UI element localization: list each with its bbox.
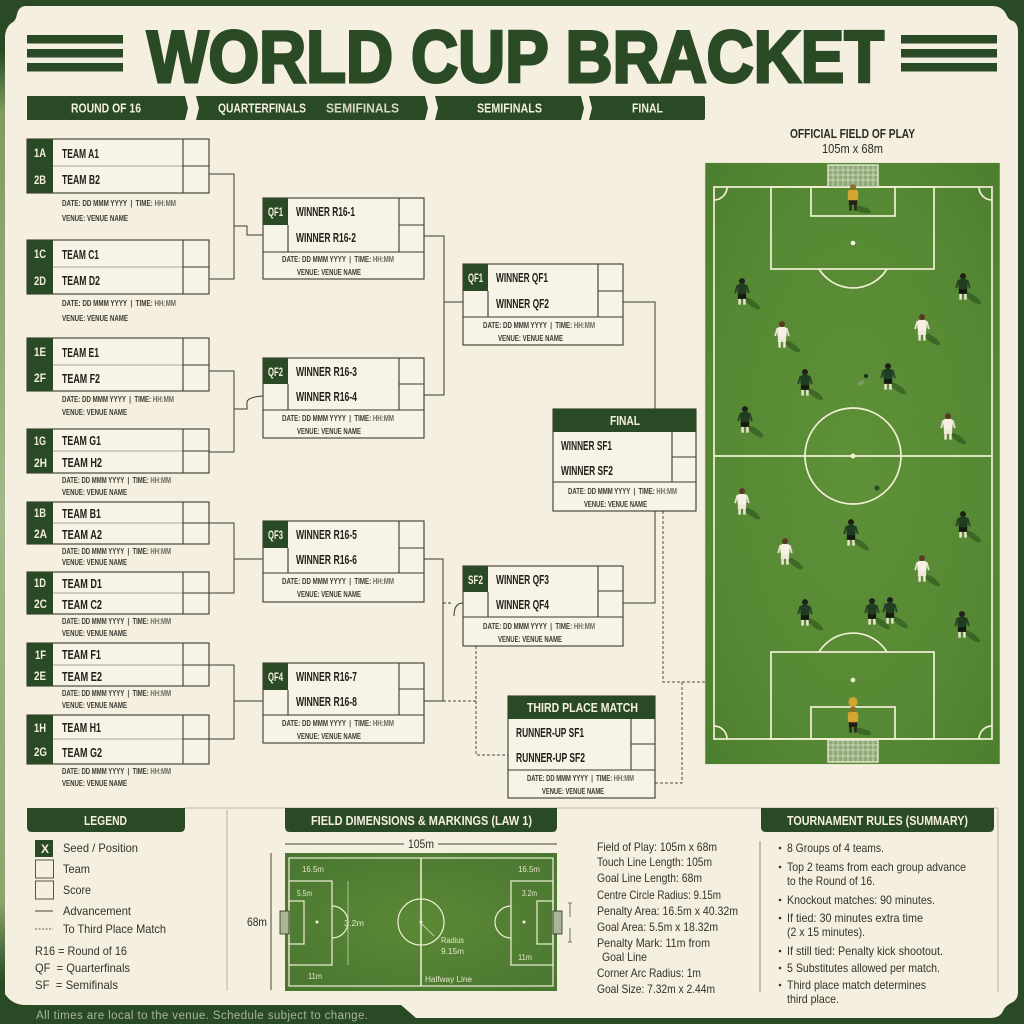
seed badge	[263, 663, 288, 690]
teams: TEAM F2	[62, 372, 100, 386]
seeds	[27, 572, 53, 614]
cell lines	[263, 521, 424, 573]
abbreviations: R16 = Round of 16	[35, 944, 127, 958]
match: R16 G1 v H2	[27, 429, 209, 497]
field specification list: Penalty Area: 16.5m x 40.32m	[597, 904, 738, 918]
field specification list: Goal Line Length: 68m	[597, 871, 702, 885]
teams: WINNER QF3	[496, 573, 549, 587]
teams	[53, 721, 183, 760]
scores	[183, 240, 209, 294]
date and venue: VENUE: VENUE NAME	[498, 333, 563, 343]
seeds: 2F	[34, 371, 46, 385]
teams: RUNNER-UP SF2	[516, 751, 585, 765]
seeds: 2C	[34, 597, 47, 611]
small pitch labels: 16.5m	[518, 865, 540, 874]
date and venue: DATE: DD MMM YYYY | TIME: HH:MM	[62, 475, 171, 485]
legend: advancement: Advancement	[63, 904, 132, 918]
teams: TEAM E1	[62, 346, 99, 360]
cell lines	[508, 719, 655, 770]
date and venue	[62, 298, 176, 323]
scores	[183, 338, 209, 391]
teams: WINNER QF2	[496, 297, 549, 311]
title text: WORLD CUP BRACKET	[147, 17, 884, 98]
teams: TEAM C2	[62, 598, 102, 612]
small pitch labels	[297, 865, 540, 984]
date and venue: VENUE: VENUE NAME	[542, 786, 604, 796]
teams: WINNER R16-1	[296, 205, 355, 219]
match: R16 A1 v B2	[27, 139, 209, 223]
date and venue: VENUE: VENUE NAME	[62, 487, 127, 497]
teams	[53, 248, 183, 288]
field markings	[714, 187, 992, 739]
date and venue	[62, 394, 174, 417]
seeds: 2G	[34, 745, 47, 759]
date and venue	[282, 413, 394, 436]
teams: WINNER SF1	[561, 439, 612, 453]
date and venue	[62, 688, 171, 710]
bottom divider	[185, 807, 998, 809]
field specification list: Goal Size: 7.32m x 2.44m	[597, 982, 715, 996]
abbreviations: SF = Semifinals	[35, 978, 118, 992]
teams	[53, 648, 183, 684]
legend header	[27, 808, 185, 832]
match: R16 F1 v E2	[27, 643, 209, 710]
seeds: 2D	[34, 274, 46, 288]
teams: TEAM C1	[62, 248, 99, 262]
cell lines	[263, 198, 424, 252]
date and venue: DATE: DD MMM YYYY | TIME: HH:MM	[62, 298, 176, 308]
connector lines	[209, 174, 705, 783]
date and venue: VENUE: VENUE NAME	[62, 407, 127, 417]
dimension: height 68m: 68m	[247, 917, 267, 929]
teams: WINNER QF1	[496, 271, 548, 285]
small pitch labels: 11m	[518, 953, 532, 962]
round: round of 16: ROUND OF 16	[71, 102, 141, 116]
field specification list: Touch Line Length: 105m	[597, 855, 712, 869]
rules text: If still tied: Penalty kick shootout.	[787, 944, 943, 958]
legend: team: Team	[63, 862, 90, 876]
match: R16 D1 v C2	[27, 572, 209, 638]
legend: score: Score	[63, 883, 91, 897]
date and venue	[483, 320, 595, 343]
round: quarterfinals: SEMIFINALS	[326, 102, 399, 116]
legend: seed	[35, 840, 138, 857]
scores	[183, 643, 209, 686]
goal bottom	[828, 740, 878, 762]
rules header: TOURNAMENT RULES (SUMMARY)	[787, 814, 968, 828]
date and venue: VENUE: VENUE NAME	[297, 267, 361, 277]
date and venue: DATE: DD MMM YYYY | TIME: HH:MM	[282, 413, 394, 423]
seeds: 1B	[34, 506, 46, 520]
date and venue	[527, 773, 634, 796]
field specification list: Field of Play: 105m x 68m	[597, 840, 717, 854]
rules text: 5 Substitutes allowed per match.	[787, 961, 940, 975]
teams	[53, 507, 183, 542]
teams: TEAM G2	[62, 746, 102, 760]
scores	[183, 502, 209, 544]
teams	[296, 205, 356, 245]
seeds	[27, 240, 53, 294]
teams	[561, 439, 613, 478]
rules text	[787, 841, 966, 1006]
field spots	[850, 241, 856, 682]
round: quarterfinals	[196, 96, 428, 120]
cell lines	[263, 358, 424, 410]
teams	[296, 365, 357, 404]
match: SF1	[463, 264, 623, 345]
cell lines	[553, 432, 696, 482]
dimension: height 68m	[247, 853, 271, 990]
date and venue: DATE: DD MMM YYYY | TIME: HH:MM	[282, 718, 394, 728]
seeds: 1D	[34, 576, 46, 590]
cell lines	[263, 663, 424, 715]
heading: official field of play: OFFICIAL FIELD OF PLAY	[790, 127, 916, 141]
teams: TEAM H1	[62, 721, 101, 735]
date and venue: VENUE: VENUE NAME	[62, 628, 127, 638]
panel: field dimensions and markings	[247, 808, 738, 996]
seed badge	[463, 566, 488, 592]
date and venue: VENUE: VENUE NAME	[584, 499, 647, 509]
seeds: 1A	[34, 146, 46, 160]
teams: TEAM H2	[62, 456, 102, 470]
scores	[183, 572, 209, 614]
legend header: LEGEND	[84, 814, 127, 828]
date and venue: DATE: DD MMM YYYY | TIME: HH:MM	[483, 320, 595, 330]
teams: TEAM A2	[62, 528, 102, 542]
teams: WINNER R16-3	[296, 365, 357, 379]
seeds: 1C	[34, 247, 46, 261]
legend: third place path: To Third Place Match	[63, 922, 166, 936]
date and venue	[282, 576, 394, 599]
legend: team	[36, 860, 90, 878]
date and venue	[282, 254, 394, 277]
match: SF2	[463, 566, 623, 646]
round: final: FINAL	[632, 102, 663, 116]
field specification list: Penalty Mark: 11m from	[597, 936, 710, 950]
small pitch labels: 3.2m	[344, 919, 364, 928]
teams: WINNER QF4	[496, 598, 549, 612]
date and venue	[62, 198, 176, 223]
seeds: 2H	[34, 456, 47, 470]
seed badge: QF1	[268, 205, 283, 219]
third place header	[508, 696, 655, 719]
field specification list	[597, 840, 738, 996]
teams: WINNER SF2	[561, 464, 613, 478]
legend: advancement	[35, 904, 132, 918]
teams	[53, 434, 183, 470]
teams: TEAM B2	[62, 173, 100, 187]
date and venue: VENUE: VENUE NAME	[62, 557, 127, 567]
teams	[53, 346, 183, 386]
teams: TEAM F1	[62, 648, 101, 662]
legend: seed: Seed / Position	[63, 841, 138, 855]
title stripes right	[901, 35, 997, 72]
seed badge	[263, 198, 288, 225]
match: QF4	[263, 663, 424, 743]
teams: WINNER R16-4	[296, 390, 357, 404]
rules text: If tied: 30 minutes extra time	[787, 911, 923, 925]
heading: official field of play	[790, 127, 916, 156]
seeds: 1H	[34, 721, 46, 735]
match: R16 H1 v G2	[27, 715, 209, 788]
seed badge	[263, 358, 288, 384]
scores	[183, 715, 209, 764]
date and venue	[62, 546, 171, 567]
goal width marker	[568, 903, 572, 942]
teams	[53, 147, 183, 187]
seed badge	[463, 264, 488, 291]
seed badge	[263, 521, 288, 548]
rules header	[761, 808, 994, 832]
match: QF2	[263, 358, 424, 438]
round: round of 16	[27, 96, 188, 120]
field specification list: Corner Arc Radius: 1m	[597, 966, 701, 980]
seeds: 2E	[34, 669, 46, 683]
date and venue	[62, 475, 171, 497]
footer note: All times are local to the venue. Schedule subject to change.	[36, 1010, 368, 1022]
teams: TEAM G1	[62, 434, 101, 448]
date and venue: VENUE: VENUE NAME	[62, 778, 127, 788]
teams: TEAM E2	[62, 670, 102, 684]
field specification list: Goal Line	[602, 950, 647, 964]
goal top	[828, 165, 878, 187]
teams: WINNER R16-2	[296, 231, 356, 245]
left edge colour strip	[0, 0, 6, 1024]
match: final	[553, 409, 696, 511]
panel: legend	[27, 808, 185, 992]
date and venue: DATE: DD MMM YYYY | TIME: HH:MM	[483, 621, 595, 631]
date and venue: VENUE: VENUE NAME	[62, 213, 128, 223]
match: third place	[508, 696, 655, 798]
round: semifinals: SEMIFINALS	[477, 102, 542, 116]
rules text: Knockout matches: 90 minutes.	[787, 893, 935, 907]
field specification list: Goal Area: 5.5m x 18.32m	[597, 920, 718, 934]
teams: WINNER R16-7	[296, 670, 357, 684]
date and venue: VENUE: VENUE NAME	[62, 700, 127, 710]
field dimensions header	[285, 808, 557, 832]
seeds: 1E	[34, 345, 46, 359]
heading: official field of play: 105m x 68m	[822, 142, 883, 156]
small pitch labels: 5.5m	[297, 889, 312, 898]
teams	[296, 528, 357, 567]
seed badge: QF2	[268, 365, 283, 379]
match: R16 C1 v D2	[27, 240, 209, 323]
field specification list: Centre Circle Radius: 9.15m	[597, 888, 721, 902]
final header	[553, 409, 696, 432]
seeds: 2B	[34, 173, 46, 187]
seeds: 2A	[34, 527, 47, 541]
cell lines	[463, 264, 623, 317]
small pitch labels: 9.15m	[441, 947, 464, 956]
date and venue: DATE: DD MMM YYYY | TIME: HH:MM	[62, 688, 171, 698]
seeds	[27, 715, 53, 764]
seed badge: QF1	[468, 271, 483, 285]
seeds	[27, 502, 53, 544]
abbreviations: QF = Quarterfinals	[35, 961, 130, 975]
match: QF3	[263, 521, 424, 602]
match: R16 E1 v F2	[27, 338, 209, 417]
grass	[705, 163, 1000, 764]
seed badge: QF4	[268, 670, 283, 684]
small pitch spots	[316, 920, 526, 924]
seeds	[27, 643, 53, 686]
round: final	[589, 96, 705, 120]
teams: TEAM D2	[62, 274, 100, 288]
teams	[296, 670, 357, 709]
title	[27, 17, 997, 98]
seeds	[27, 429, 53, 473]
date and venue: VENUE: VENUE NAME	[62, 313, 128, 323]
teams: WINNER R16-5	[296, 528, 357, 542]
rules text: to the Round of 16.	[787, 874, 875, 888]
date and venue: DATE: DD MMM YYYY | TIME: HH:MM	[282, 254, 394, 264]
date and venue: DATE: DD MMM YYYY | TIME: HH:MM	[62, 394, 174, 404]
field dimensions header: FIELD DIMENSIONS & MARKINGS (LAW 1)	[311, 814, 532, 828]
small pitch markings	[289, 858, 553, 986]
small pitch labels: Radius	[441, 936, 464, 945]
small pitch labels: Halfway Line	[425, 975, 473, 984]
scores	[183, 429, 209, 473]
legend: seed: X	[41, 842, 49, 856]
small pitch labels: 11m	[308, 972, 322, 981]
rules text: third place.	[787, 992, 839, 1006]
teams: TEAM D1	[62, 577, 102, 591]
date and venue	[62, 766, 171, 788]
players	[735, 184, 983, 737]
seeds: 1F	[35, 648, 46, 662]
rules text: 8 Groups of 4 teams.	[787, 841, 884, 855]
match: QF1	[263, 198, 424, 279]
teams	[53, 577, 183, 612]
third place header: THIRD PLACE MATCH	[527, 701, 638, 715]
teams: TEAM A1	[62, 147, 99, 161]
final header: FINAL	[610, 414, 640, 428]
date and venue: VENUE: VENUE NAME	[297, 589, 361, 599]
seeds	[27, 338, 53, 391]
title stripes left	[27, 35, 123, 72]
rules text: Third place match determines	[787, 978, 926, 992]
date and venue: VENUE: VENUE NAME	[297, 426, 361, 436]
round headers	[27, 96, 705, 120]
date and venue: DATE: DD MMM YYYY | TIME: HH:MM	[62, 616, 171, 626]
teams: WINNER R16-8	[296, 695, 357, 709]
round: semifinals	[435, 96, 584, 120]
small pitch goals	[280, 911, 562, 934]
rules text: (2 x 15 minutes).	[787, 925, 865, 939]
date and venue	[568, 486, 677, 509]
match: R16 B1 v A2	[27, 502, 209, 567]
date and venue: DATE: DD MMM YYYY | TIME: HH:MM	[62, 766, 171, 776]
date and venue: DATE: DD MMM YYYY | TIME: HH:MM	[62, 546, 171, 556]
round: quarterfinals: QUARTERFINALS	[218, 102, 306, 116]
date and venue: DATE: DD MMM YYYY | TIME: HH:MM	[527, 773, 634, 783]
seed badge: QF3	[268, 528, 283, 542]
teams: TEAM B1	[62, 507, 101, 521]
date and venue: DATE: DD MMM YYYY | TIME: HH:MM	[282, 576, 394, 586]
abbreviations	[35, 944, 130, 992]
date and venue: DATE: DD MMM YYYY | TIME: HH:MM	[568, 486, 677, 496]
rules bullets	[779, 847, 781, 986]
date and venue	[62, 616, 171, 638]
cell lines	[463, 566, 623, 617]
scores	[183, 139, 209, 193]
date and venue: VENUE: VENUE NAME	[297, 731, 361, 741]
seeds: 1G	[34, 434, 46, 448]
seeds	[27, 139, 53, 193]
seed badge: SF2	[468, 573, 483, 587]
date and venue	[483, 621, 595, 644]
teams: RUNNER-UP SF1	[516, 726, 584, 740]
teams	[496, 573, 549, 612]
date and venue	[282, 718, 394, 741]
teams	[496, 271, 549, 311]
dimension: width 105m: 105m	[408, 839, 434, 851]
small pitch labels: 3.2m	[522, 889, 537, 898]
small pitch diagram	[280, 853, 562, 991]
panel: tournament rules	[761, 808, 994, 1006]
legend: score	[36, 881, 91, 899]
teams: WINNER R16-6	[296, 553, 357, 567]
rules text: Top 2 teams from each group advance	[787, 860, 966, 874]
main football field	[705, 162, 1000, 764]
date and venue: DATE: DD MMM YYYY | TIME: HH:MM	[62, 198, 176, 208]
small pitch labels: 16.5m	[302, 865, 324, 874]
teams	[516, 726, 585, 765]
date and venue: VENUE: VENUE NAME	[498, 634, 562, 644]
